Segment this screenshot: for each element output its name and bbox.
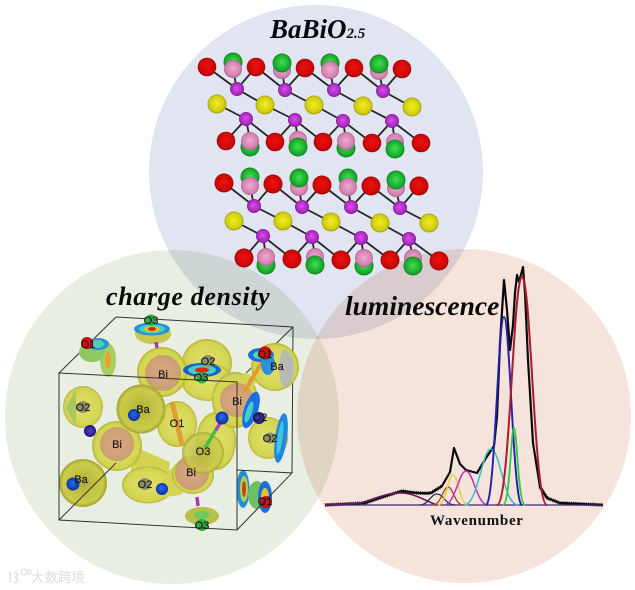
fitted peak: blue	[486, 317, 522, 505]
atom labels: O2	[76, 402, 90, 414]
atom labels: O2	[263, 433, 277, 445]
atom labels: O3	[144, 315, 158, 327]
fitted peak: broad purple	[325, 493, 437, 505]
atom labels: O2	[138, 479, 152, 491]
atom labels: O2	[253, 412, 267, 424]
luminescence spectrum chart	[325, 267, 603, 505]
fitted peak: brown	[433, 487, 463, 505]
atom labels: O1	[81, 339, 95, 351]
watermark logo and text	[10, 569, 85, 585]
atom labels: O3	[194, 372, 208, 384]
atom labels: O2	[201, 356, 215, 368]
baseline	[325, 504, 603, 506]
panel: right circle luminescence	[297, 249, 631, 583]
atom labels: O1	[258, 496, 272, 508]
atom labels: Ba	[136, 404, 151, 416]
atom labels: O3	[196, 446, 210, 458]
charge density unit cell model	[59, 314, 299, 532]
fitted peak: cyan	[464, 449, 518, 505]
ion spheres	[66, 409, 228, 495]
fitted peak: yellow	[438, 475, 468, 505]
heading: charge density: charge density	[106, 282, 270, 311]
crystal structure: upper layer	[198, 52, 430, 158]
atom labels: O1	[170, 418, 184, 430]
noisy black spectrum	[325, 267, 603, 505]
heading: luminescence: luminescence	[345, 290, 499, 321]
fitted peak: dark red	[497, 277, 547, 505]
atom labels: Ba	[270, 361, 285, 373]
fitted peak: green	[503, 428, 525, 505]
charge contour sections	[77, 314, 290, 531]
crystal structure: lower layer	[214, 168, 448, 276]
fitted peak: navy	[420, 494, 455, 505]
atom labels: O3	[195, 520, 209, 532]
atom labels: Bi	[158, 369, 168, 381]
heading: BaBiO2.5: BaBiO2.5	[269, 14, 366, 44]
axis label: Wavenumber: Wavenumber	[430, 513, 524, 529]
atom labels: Ba	[74, 474, 89, 486]
atom labels: Bi	[232, 396, 242, 408]
panel: left circle charge density	[5, 250, 339, 584]
panel: top circle BaBiO2.5	[149, 5, 483, 339]
atom labels: Bi	[186, 467, 196, 479]
fitted peak: magenta	[444, 471, 488, 505]
atom labels: O1	[258, 349, 272, 361]
atom labels: Bi	[112, 439, 122, 451]
watermark logo and text: 大数跨境	[31, 570, 85, 585]
atom labels	[74, 315, 285, 532]
